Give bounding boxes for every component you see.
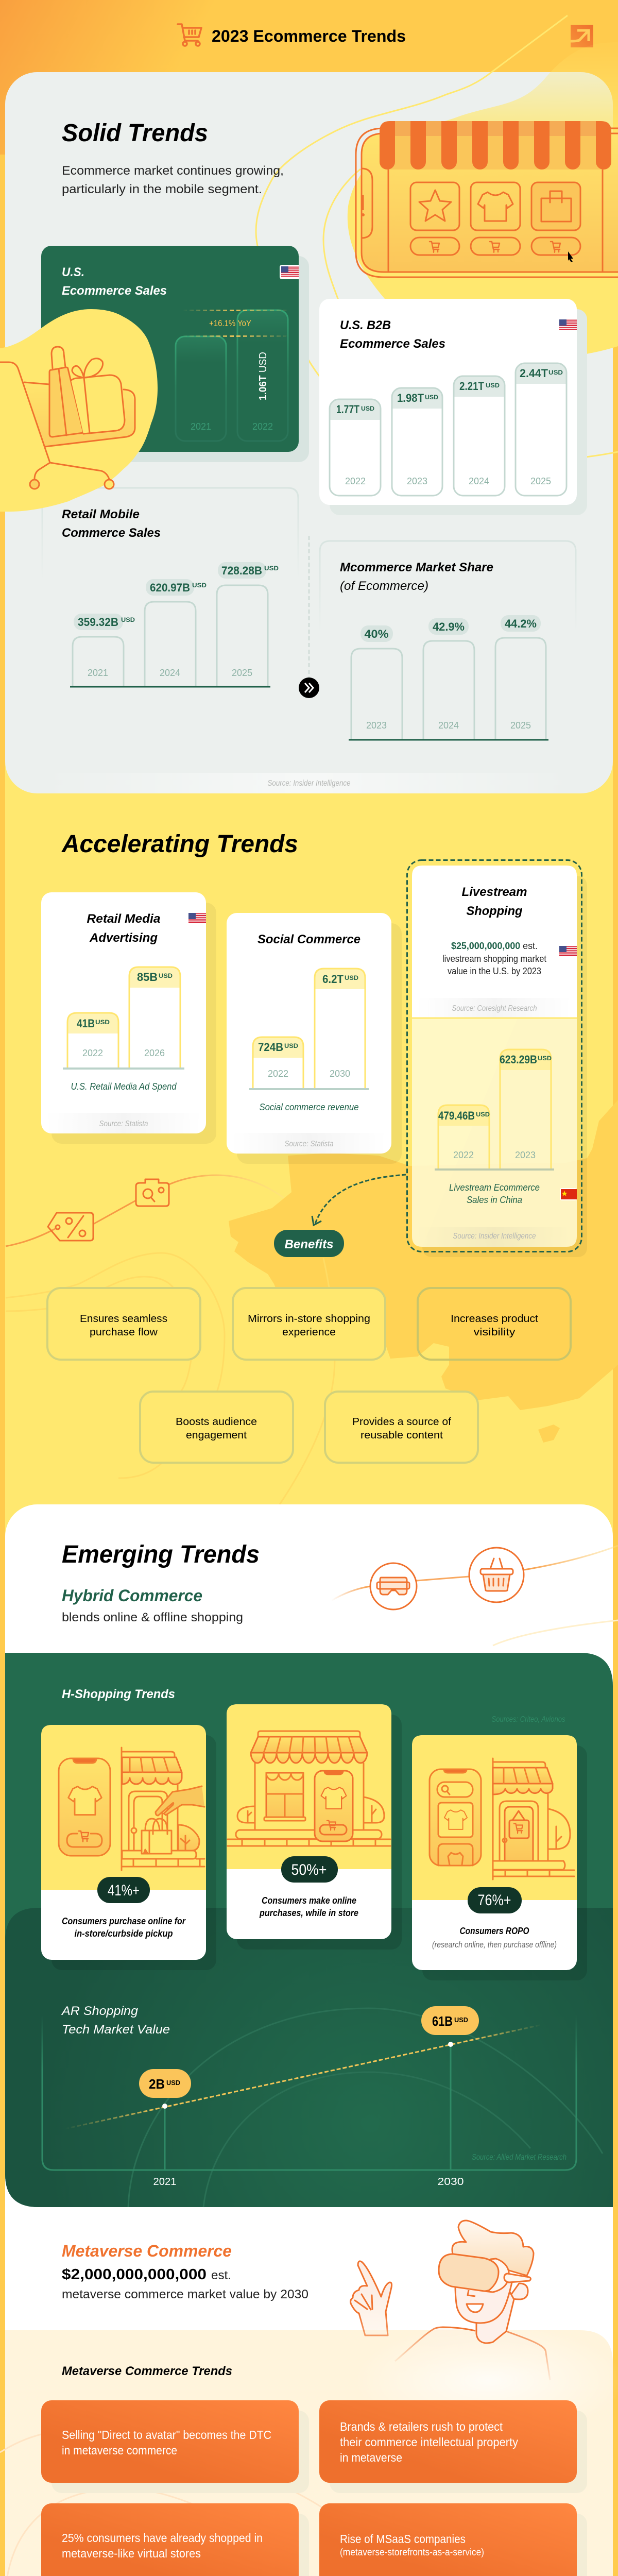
metaverse commerce intro: metaverse commerce market value by 2030 bbox=[62, 2287, 308, 2301]
icon: US flag bbox=[559, 319, 577, 331]
card: livestream shopping bbox=[407, 860, 587, 1257]
benefit: reusable content: reusable content bbox=[360, 1430, 443, 1441]
benefit: audience engagement bbox=[140, 1392, 293, 1463]
YoY label: +16.1% YoY bbox=[209, 318, 251, 328]
stat text: $25,000,000,000 est. bbox=[451, 941, 538, 951]
pill: stat: 76%+ bbox=[478, 1892, 511, 1909]
bar chart: 2022 bbox=[345, 476, 366, 486]
benefit: audience engagement: Boosts audience bbox=[176, 1416, 257, 1428]
subheading: Hybrid Commerce bbox=[62, 1586, 202, 1605]
card: retail media advertising: U.S. Retail Media Ad Spend bbox=[71, 1081, 177, 1092]
bar chart: 2022 bbox=[268, 1069, 288, 1079]
bar chart: 2026 bbox=[144, 1048, 165, 1058]
card: direct to avatar: in metaverse commerce bbox=[62, 2444, 177, 2457]
card title bbox=[62, 265, 167, 298]
phone bbox=[59, 1758, 110, 1856]
card: social commerce: Social Commerce bbox=[258, 933, 360, 946]
product tiles bbox=[410, 182, 580, 255]
card: US B2B ecommerce sales bbox=[319, 299, 587, 515]
icon: US flag bbox=[280, 265, 299, 279]
bar chart: 40% bbox=[365, 628, 388, 640]
phone bbox=[315, 1771, 353, 1841]
card: mcommerce market share: Mcommerce Market Share bbox=[340, 561, 493, 574]
card: ROPO bbox=[412, 1735, 587, 1980]
source note bbox=[417, 998, 572, 1018]
benefits pill: Benefits bbox=[284, 1238, 334, 1251]
bar chart: 1.98T bbox=[397, 392, 424, 404]
illustration: person in VR headset bbox=[351, 2221, 550, 2385]
card: retail media advertising bbox=[41, 892, 216, 1144]
bar chart: 44.2% bbox=[505, 617, 537, 630]
card: direct to avatar: Selling "Direct to avatar" becomes the DTC bbox=[62, 2428, 271, 2442]
value: 2030: USD bbox=[454, 2016, 468, 2024]
pill: stat bbox=[97, 1877, 150, 1903]
intro text: Ecommerce market continues growing, bbox=[62, 164, 284, 178]
bar chart: USD bbox=[264, 565, 279, 572]
phone bbox=[430, 1769, 481, 1866]
bar chart: USD bbox=[548, 369, 563, 376]
icons: tag and camera with connecting line bbox=[6, 1175, 284, 1246]
heading: Emerging Trends bbox=[62, 1541, 260, 1568]
card: US ecommerce sales: 2021 bbox=[191, 421, 211, 432]
card text: in-store/curbside pickup bbox=[74, 1928, 173, 1939]
source note bbox=[41, 773, 577, 793]
bar chart: 2022 bbox=[453, 1150, 474, 1160]
intro text bbox=[62, 164, 284, 196]
benefit: product visibility: Increases product bbox=[451, 1313, 538, 1325]
intro text: particularly in the mobile segment. bbox=[62, 182, 262, 196]
icon: cursor bbox=[568, 251, 573, 262]
icon: US flag bbox=[188, 913, 206, 924]
card: livestream shopping: Livestream bbox=[461, 885, 527, 899]
card: US B2B ecommerce sales: Ecommerce Sales bbox=[340, 337, 445, 351]
value: 2030: 61B bbox=[432, 2013, 453, 2029]
card: livestream shopping: Shopping bbox=[467, 904, 523, 918]
yellow blob with shopping cart illustration bbox=[0, 309, 158, 512]
icon: camera search bbox=[136, 1179, 169, 1206]
metaverse commerce intro bbox=[62, 2242, 308, 2301]
bar chart: USD bbox=[476, 1111, 490, 1118]
header bbox=[178, 24, 406, 46]
chart: AR shopping market value: 2021 bbox=[153, 2176, 176, 2188]
card: retail mobile commerce sales: Retail Mobile bbox=[62, 507, 140, 521]
card text: Consumers ROPO bbox=[459, 1926, 529, 1936]
decorative lines bbox=[0, 2434, 324, 2576]
bar chart: USD bbox=[121, 616, 135, 623]
illustration: store with phone bbox=[228, 1731, 390, 1846]
bar chart: 2023 bbox=[515, 1150, 536, 1160]
icon: brand logo bbox=[571, 25, 593, 47]
china map backdrop bbox=[229, 1100, 618, 1443]
source note: Source: Insider Intelligence bbox=[453, 1232, 536, 1241]
bar chart bbox=[349, 615, 548, 740]
bar 2021 bbox=[176, 336, 226, 441]
card: retail media advertising: Retail Media bbox=[87, 912, 161, 926]
bar chart bbox=[63, 967, 184, 1069]
bar chart: USD bbox=[345, 974, 358, 981]
bar chart: USD bbox=[486, 382, 500, 389]
bar chart: 2024 bbox=[469, 476, 489, 486]
bar chart: USD bbox=[95, 1019, 110, 1026]
bar chart bbox=[70, 562, 279, 687]
illustration: phone storefront bbox=[356, 121, 618, 277]
card: social commerce bbox=[227, 913, 402, 1164]
benefit: mirrors in-store experience: Mirrors in-store shopping bbox=[248, 1313, 370, 1325]
heading: Metaverse Commerce Trends bbox=[62, 2364, 232, 2378]
icon: hand bbox=[156, 1786, 204, 1816]
icon: shopping cart bbox=[178, 24, 201, 46]
value: 2021: 2B bbox=[149, 2076, 165, 2092]
decorative curves on yellow bbox=[6, 1253, 335, 1504]
icon: percent tag bbox=[48, 1213, 93, 1241]
card: consumers shopped bbox=[41, 2503, 309, 2576]
bar chart: 2023 bbox=[407, 476, 427, 486]
benefit: seamless purchase flow: Ensures seamless bbox=[80, 1313, 167, 1325]
benefit: product visibility bbox=[418, 1288, 571, 1360]
metaverse commerce intro: Metaverse Commerce bbox=[62, 2242, 232, 2260]
icon: cart frame bbox=[0, 362, 135, 489]
bar chart: 42.9% bbox=[433, 620, 465, 633]
decorative arcs bbox=[128, 2008, 603, 2207]
bar chart: 2030 bbox=[330, 1069, 350, 1079]
icon: shopping basket bbox=[469, 1548, 524, 1602]
subtitle: blends online & offline shopping bbox=[62, 1611, 243, 1624]
heading: H-Shopping Trends bbox=[62, 1687, 175, 1701]
chart: AR shopping market value: Source: Allied Market Research bbox=[472, 2153, 566, 2162]
bar 2022 bbox=[237, 310, 288, 441]
bar chart: 2.21T bbox=[459, 380, 484, 393]
dashed outline bbox=[407, 860, 582, 1252]
bar chart: 41B bbox=[77, 1017, 95, 1030]
stat text bbox=[442, 941, 546, 976]
card: livestream shopping: Livestream Ecommerce bbox=[449, 1182, 540, 1193]
value: 2021 bbox=[139, 2069, 191, 2098]
icon: shirt bbox=[478, 192, 513, 221]
card: retail mobile commerce sales: Commerce Sales bbox=[62, 526, 161, 540]
illustration: phone search and store bbox=[430, 1758, 574, 1879]
bar chart: USD bbox=[192, 582, 207, 589]
card: online for pickup bbox=[41, 1725, 216, 1970]
source note: Source: Statista bbox=[284, 1140, 334, 1148]
background blob bbox=[348, 42, 618, 358]
bar chart: 6.2T bbox=[322, 973, 344, 986]
bar chart: 2024 bbox=[438, 720, 459, 731]
bar chart bbox=[249, 969, 369, 1089]
source note bbox=[46, 1113, 201, 1133]
card: MSaaS: (metaverse-storefronts-as-a-service) bbox=[340, 2547, 484, 2558]
chart: AR shopping market value: Tech Market Value bbox=[62, 2023, 170, 2037]
card: US ecommerce sales bbox=[41, 246, 309, 462]
panel: solid trends bbox=[0, 15, 618, 793]
card: US ecommerce sales: 2022 bbox=[252, 421, 273, 432]
icons: VR and basket with connecting line bbox=[331, 1546, 618, 1646]
icon: gift box bbox=[71, 359, 125, 434]
chart: AR shopping market value: AR Shopping bbox=[61, 2004, 139, 2018]
heading: Solid Trends bbox=[62, 120, 208, 147]
benefit: audience engagement: engagement bbox=[186, 1430, 247, 1441]
card: brands protect IP: their commerce intellectual property bbox=[340, 2435, 518, 2449]
benefit: reusable content bbox=[325, 1392, 478, 1463]
bar chart: 2022 bbox=[82, 1048, 103, 1058]
awning bbox=[380, 121, 611, 170]
card: brands protect IP bbox=[319, 2400, 587, 2493]
title: 2023 Ecommerce Trends bbox=[212, 27, 406, 45]
card text bbox=[432, 1926, 557, 1950]
panel: metaverse commerce trends bbox=[0, 2221, 618, 2576]
arrow: livestream to benefits bbox=[312, 1175, 406, 1225]
pointing hand bbox=[351, 2261, 392, 2335]
benefits pill bbox=[274, 1230, 344, 1257]
bar chart: 85B bbox=[137, 971, 158, 984]
card: consumers shopped: 25% consumers have already shopped in bbox=[62, 2531, 263, 2545]
benefit: mirrors in-store experience: experience bbox=[282, 1327, 336, 1338]
icon: star bbox=[419, 190, 451, 221]
icon: US flag bbox=[559, 946, 577, 957]
value: 2030 bbox=[421, 2006, 479, 2035]
card: mcommerce market share bbox=[320, 541, 576, 740]
card text: Consumers make online bbox=[262, 1895, 356, 1906]
icon: China flag bbox=[560, 1188, 577, 1200]
card text bbox=[259, 1895, 358, 1918]
card: livestream shopping: Sales in China bbox=[467, 1195, 522, 1205]
icon: bush bbox=[178, 1825, 199, 1851]
source note: Sources: Criteo, Avionos bbox=[491, 1715, 565, 1724]
card: brands protect IP: in metaverse bbox=[340, 2451, 402, 2464]
card: MSaaS: Rise of MSaaS companies bbox=[340, 2532, 466, 2546]
benefit: seamless purchase flow bbox=[47, 1288, 200, 1360]
arrow connector bbox=[299, 536, 319, 698]
stat text: livestream shopping market bbox=[442, 954, 546, 964]
pill: stat bbox=[468, 1887, 522, 1913]
card title: U.S. bbox=[62, 265, 84, 279]
card text: (research online, then purchase offline) bbox=[432, 1940, 557, 1950]
bar chart: 620.97B bbox=[150, 581, 190, 594]
panel: emerging trends bbox=[5, 1504, 618, 2576]
panel: hybrid commerce green bbox=[5, 1653, 613, 2207]
bar chart: USD bbox=[159, 972, 173, 979]
bar chart: 2025 bbox=[232, 668, 252, 678]
card: brands protect IP: Brands & retailers rush to protect bbox=[340, 2420, 503, 2433]
bar chart: USD bbox=[425, 394, 438, 401]
section: accelerating trends bbox=[6, 831, 587, 1463]
benefit: seamless purchase flow: purchase flow bbox=[90, 1327, 158, 1338]
icon: bottle in bag bbox=[49, 347, 83, 437]
card: retail media advertising: Advertising bbox=[89, 931, 158, 945]
card: direct to avatar bbox=[41, 2400, 309, 2493]
bar chart: USD bbox=[284, 1042, 298, 1049]
benefit: product visibility: visibility bbox=[474, 1327, 515, 1338]
bar chart: 1.77T bbox=[336, 403, 359, 416]
source note: Source: Statista bbox=[99, 1120, 148, 1128]
headset bbox=[439, 2254, 530, 2292]
icon: shopping bag bbox=[142, 1819, 171, 1854]
card: MSaaS bbox=[319, 2503, 587, 2576]
source note: Source: Insider Intelligence bbox=[268, 779, 351, 788]
metaverse commerce intro: est. bbox=[211, 2268, 231, 2282]
chart: AR shopping market value bbox=[42, 2004, 576, 2188]
source note bbox=[232, 1133, 386, 1154]
value: 1.06T USD bbox=[258, 352, 269, 400]
pill: stat bbox=[281, 1856, 338, 1883]
bar chart: 728.28B bbox=[221, 564, 262, 577]
pill: stat: 50%+ bbox=[291, 1861, 327, 1878]
pill: stat: 41%+ bbox=[108, 1882, 140, 1899]
bar chart: 359.32B bbox=[78, 616, 118, 629]
bar chart bbox=[330, 363, 566, 496]
benefit: reusable content: Provides a source of bbox=[352, 1416, 451, 1428]
bar chart: 623.29B bbox=[500, 1053, 537, 1066]
card text: Consumers purchase online for bbox=[62, 1916, 186, 1926]
metaverse commerce intro: $2,000,000,000,000 bbox=[62, 2266, 207, 2283]
body bbox=[395, 2327, 550, 2385]
card: consumers shopped: metaverse-like virtual stores bbox=[62, 2547, 201, 2560]
ear and neck bbox=[455, 2282, 528, 2343]
card title: Ecommerce Sales bbox=[62, 284, 167, 298]
bar chart: 2025 bbox=[510, 720, 531, 731]
chart: AR shopping market value: 2030 bbox=[438, 2176, 464, 2188]
card: mcommerce market share: (of Ecommerce) bbox=[340, 579, 428, 593]
bar chart: USD bbox=[538, 1055, 552, 1062]
bar chart: 2021 bbox=[88, 668, 108, 678]
card: retail mobile commerce sales bbox=[42, 488, 298, 687]
bar chart: 2.44T bbox=[520, 367, 548, 380]
bar chart: 2025 bbox=[530, 476, 551, 486]
decorative curve lines bbox=[256, 15, 618, 458]
card: social commerce: Social commerce revenue bbox=[260, 1102, 358, 1112]
icon: bag bbox=[541, 191, 571, 222]
card text: purchases, while in store bbox=[259, 1908, 358, 1918]
bar chart: 2024 bbox=[160, 668, 180, 678]
card: online while in store bbox=[227, 1704, 402, 1950]
value: 2021: USD bbox=[166, 2079, 180, 2087]
basket interior bbox=[24, 382, 135, 447]
bar chart bbox=[435, 1049, 554, 1170]
bar chart: 724B bbox=[258, 1041, 283, 1054]
icon: VR headset bbox=[370, 1563, 417, 1609]
source note bbox=[417, 1227, 572, 1247]
source note: Source: Coresight Research bbox=[452, 1004, 537, 1013]
growth dashes bbox=[183, 310, 286, 336]
heading: Accelerating Trends bbox=[61, 831, 298, 858]
card: US B2B ecommerce sales: U.S. B2B bbox=[340, 318, 391, 332]
bar chart: 479.46B bbox=[438, 1109, 475, 1122]
illustration: phone and store pickup bbox=[59, 1748, 204, 1870]
benefit: mirrors in-store experience bbox=[233, 1288, 385, 1360]
card text bbox=[62, 1916, 186, 1939]
bar chart: 2023 bbox=[366, 720, 387, 731]
hair bbox=[452, 2221, 534, 2276]
stat text: value in the U.S. by 2023 bbox=[448, 966, 541, 976]
bar chart: USD bbox=[361, 405, 374, 412]
